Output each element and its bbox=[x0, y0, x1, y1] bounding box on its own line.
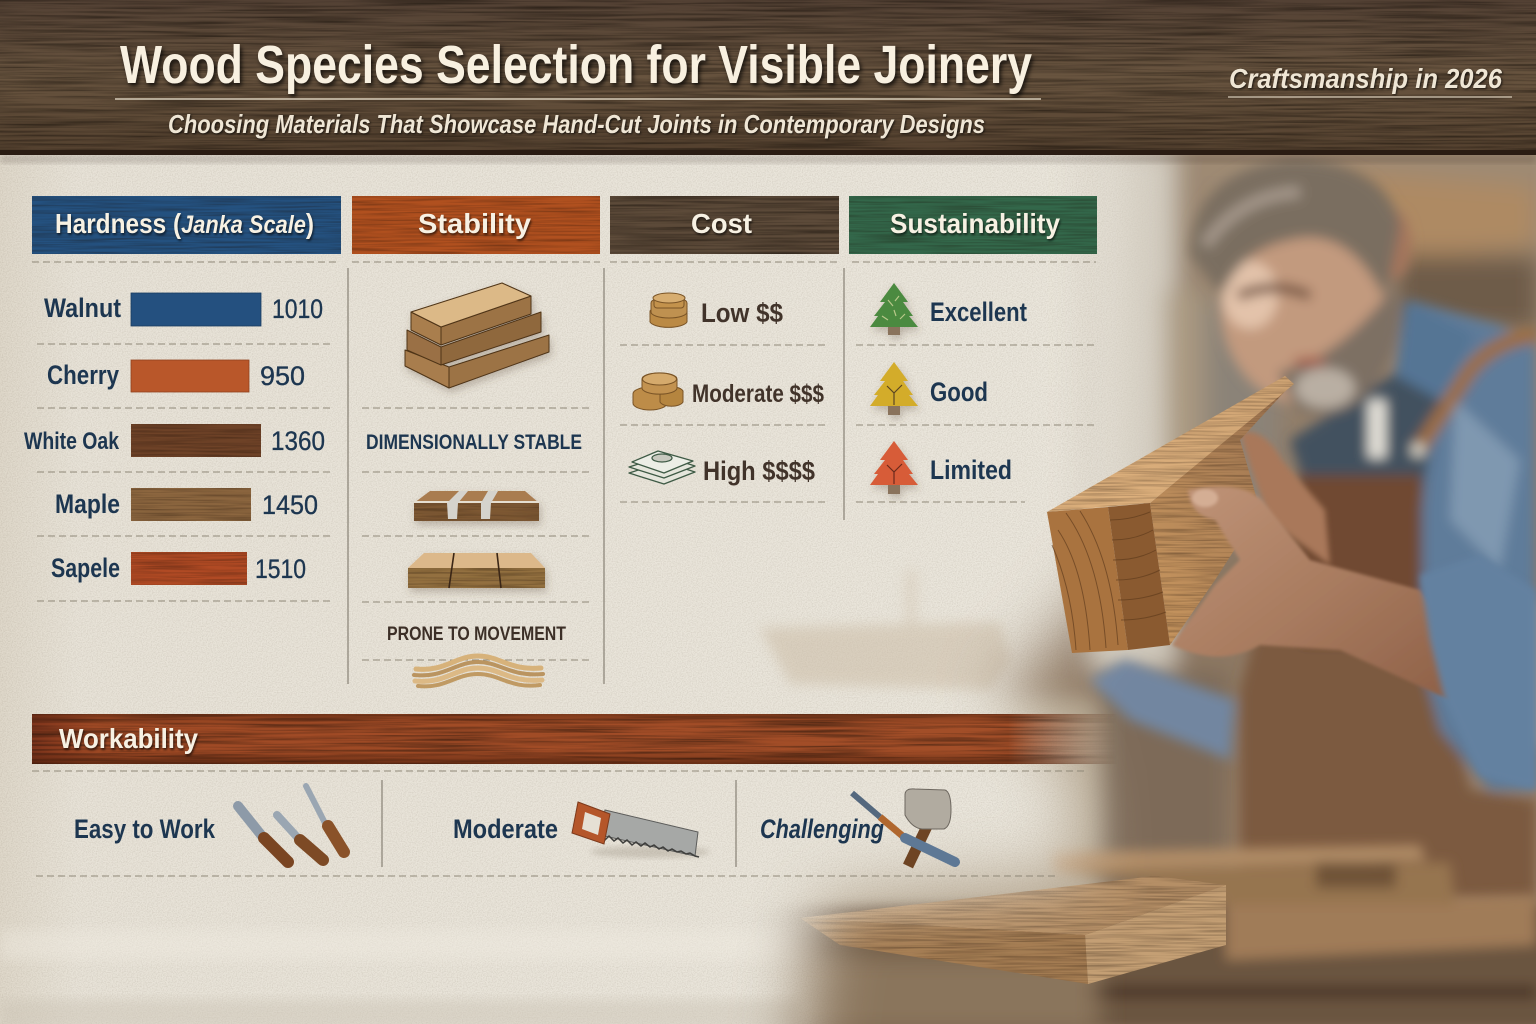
column: cost bbox=[610, 196, 839, 502]
label: dimensionally stable: DIMENSIONALLY STABLE bbox=[366, 431, 582, 454]
row: limited bbox=[870, 441, 1012, 494]
icon: warped boards bbox=[414, 656, 543, 686]
row: Maple 1450: 1450 bbox=[262, 490, 318, 520]
front hand and forearm bbox=[1172, 487, 1536, 790]
row: Maple 1450 bbox=[55, 488, 318, 521]
header: cost: Cost bbox=[691, 208, 752, 239]
item: challenging bbox=[760, 789, 955, 866]
tagline: Craftsmanship in 2026 bbox=[1229, 63, 1502, 94]
row: limited: Limited bbox=[930, 455, 1012, 485]
row: high cost: High $$$$ bbox=[703, 456, 815, 486]
row: low cost: Low $$ bbox=[701, 298, 783, 328]
icon: chisels bbox=[238, 786, 344, 862]
row: Walnut 1010: 1010 bbox=[272, 294, 323, 324]
item: moderate: Moderate bbox=[453, 814, 558, 844]
header: stability bbox=[352, 196, 600, 254]
column: stability bbox=[352, 196, 600, 686]
icon: mallet and chisel bbox=[852, 789, 955, 866]
row: moderate cost: Moderate $$$ bbox=[692, 380, 824, 408]
row: Cherry 950: Cherry bbox=[47, 360, 119, 390]
row: Maple 1450: Maple bbox=[55, 489, 120, 519]
header band bbox=[0, 0, 1536, 163]
icon: stacked boards bbox=[405, 283, 549, 388]
man bbox=[1090, 160, 1536, 900]
item: easy to work: Easy to Work bbox=[74, 814, 216, 844]
title: Wood Species Selection for Visible Joinery bbox=[120, 35, 1032, 95]
workability banner: Workability bbox=[59, 723, 198, 754]
column: hardness bbox=[24, 196, 341, 601]
row: Walnut 1010: Walnut bbox=[44, 293, 121, 323]
row: good bbox=[870, 362, 988, 415]
row: Walnut 1010 bbox=[44, 293, 323, 326]
row: high cost bbox=[629, 451, 815, 486]
back hand bbox=[1240, 432, 1330, 565]
row: White Oak 1360: White Oak bbox=[24, 428, 120, 455]
header: sustainability bbox=[849, 196, 1097, 254]
workbench bbox=[700, 845, 1536, 1024]
row: moderate cost bbox=[633, 373, 824, 410]
faint blurred workshop table bbox=[760, 570, 1010, 690]
header: sustainability: Sustainability bbox=[890, 208, 1060, 239]
subtitle: Choosing Materials That Showcase Hand-Cut Joints in Contemporary Designs bbox=[168, 109, 985, 139]
row: Cherry 950 bbox=[47, 360, 305, 392]
row: Sapele 1510 bbox=[51, 552, 306, 585]
item: easy to work bbox=[74, 786, 344, 862]
header: hardness bbox=[32, 196, 341, 254]
icon: clamped board bbox=[414, 491, 539, 521]
row: low cost bbox=[650, 293, 783, 328]
row: Cherry 950: 950 bbox=[260, 361, 305, 391]
row: Sapele 1510: Sapele bbox=[51, 553, 120, 583]
icon: hand saw bbox=[572, 802, 710, 858]
header: cost bbox=[610, 196, 839, 254]
row: Sapele 1510: 1510 bbox=[255, 554, 306, 584]
workability banner bbox=[32, 714, 1117, 764]
wood block held bbox=[1047, 376, 1294, 653]
icon: jointed blocks bbox=[408, 553, 545, 588]
panel: workability bbox=[32, 714, 1117, 876]
row: White Oak 1360: 1360 bbox=[271, 426, 325, 456]
row: excellent: Excellent bbox=[930, 297, 1027, 327]
row: White Oak 1360 bbox=[24, 424, 325, 457]
item: challenging: Challenging bbox=[760, 814, 884, 844]
photo: workshop background and craftsman bbox=[758, 155, 1536, 1024]
header: stability: Stability bbox=[418, 208, 531, 239]
column: sustainability bbox=[849, 196, 1097, 502]
label: prone to movement: PRONE TO MOVEMENT bbox=[387, 624, 566, 645]
row: excellent bbox=[870, 283, 1027, 335]
header: hardness: Hardness (Janka Scale) bbox=[55, 208, 314, 239]
item: moderate bbox=[453, 802, 710, 858]
row: good: Good bbox=[930, 377, 988, 407]
